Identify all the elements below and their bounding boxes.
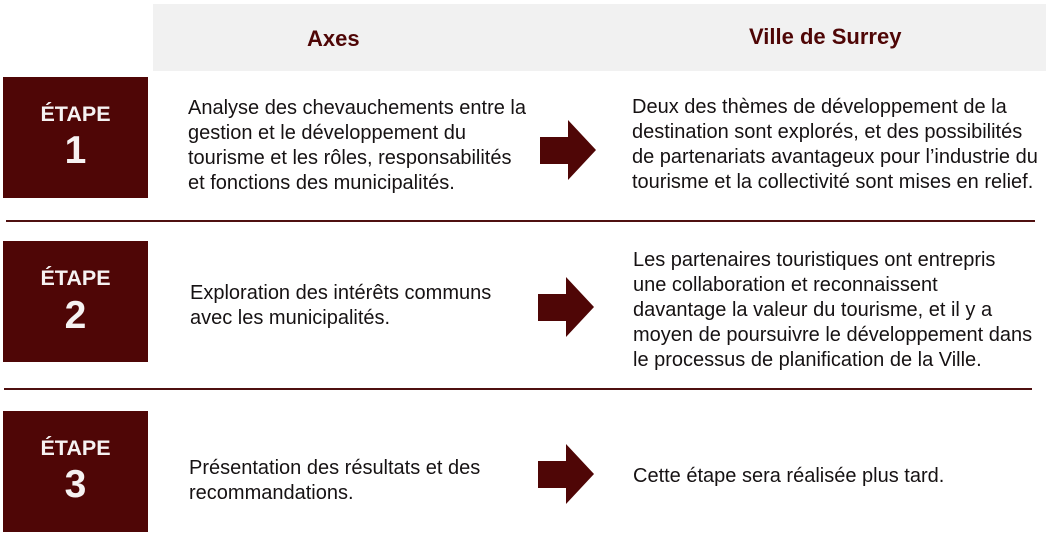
heading: Ville de Surrey: Ville de Surrey xyxy=(749,24,901,49)
step 1 label: ÉTAPE xyxy=(40,102,111,126)
arrow: step 1 xyxy=(540,120,596,180)
step 1 Surrey text: tourisme et la collectivité sont mises en relief. xyxy=(632,171,1033,193)
step 1 Surrey text: Deux des thèmes de développement de la xyxy=(632,96,1007,118)
step 2 Surrey text: moyen de poursuivre le développement dans xyxy=(633,324,1032,346)
step 1 axes text: Analyse des chevauchements entre la xyxy=(188,97,526,119)
step 1 axes text xyxy=(188,97,526,194)
step 3 number: 3 xyxy=(65,463,86,506)
step 2 axes text xyxy=(190,282,491,329)
arrow: step 2 xyxy=(538,277,594,337)
step 3 axes text: recommandations. xyxy=(189,482,354,504)
step 1 number: 1 xyxy=(65,129,86,172)
step 2 number: 2 xyxy=(65,294,86,337)
step 2 Surrey text: davantage la valeur du tourisme, et il y a xyxy=(633,299,992,321)
step 2 Surrey text xyxy=(633,249,1032,371)
step 3 axes text xyxy=(189,457,480,504)
step 2 label: ÉTAPE xyxy=(40,266,111,290)
step 3 badge xyxy=(3,411,148,532)
step 2 Surrey text: le processus de planification de la Ville. xyxy=(633,349,982,371)
step 1 axes text: tourisme et les rôles, responsabilités xyxy=(188,147,511,169)
step 1 Surrey text: destination sont explorés, et des possibilités xyxy=(632,121,1022,143)
step 2 axes text: Exploration des intérêts communs xyxy=(190,282,491,304)
arrow: step 3 xyxy=(538,444,594,504)
header band xyxy=(153,4,1046,71)
step 1 Surrey text xyxy=(632,96,1038,193)
step 3 Surrey text: Cette étape sera réalisée plus tard. xyxy=(633,465,944,487)
step 1 axes text: gestion et le développement du xyxy=(188,122,466,144)
step 1 Surrey text: de partenariats avantageux pour l’industrie du xyxy=(632,146,1038,168)
step 1 axes text: et fonctions des municipalités. xyxy=(188,172,455,194)
step 2 Surrey text: une collaboration et reconnaissent xyxy=(633,274,938,296)
step 2 Surrey text: Les partenaires touristiques ont entrepris xyxy=(633,249,995,271)
step 2 axes text: avec les municipalités. xyxy=(190,307,390,329)
step 1 badge xyxy=(3,77,148,198)
step 3 label: ÉTAPE xyxy=(40,436,111,460)
step 3 axes text: Présentation des résultats et des xyxy=(189,457,480,479)
step 2 badge xyxy=(3,241,148,362)
heading: Axes: Axes xyxy=(307,26,360,51)
